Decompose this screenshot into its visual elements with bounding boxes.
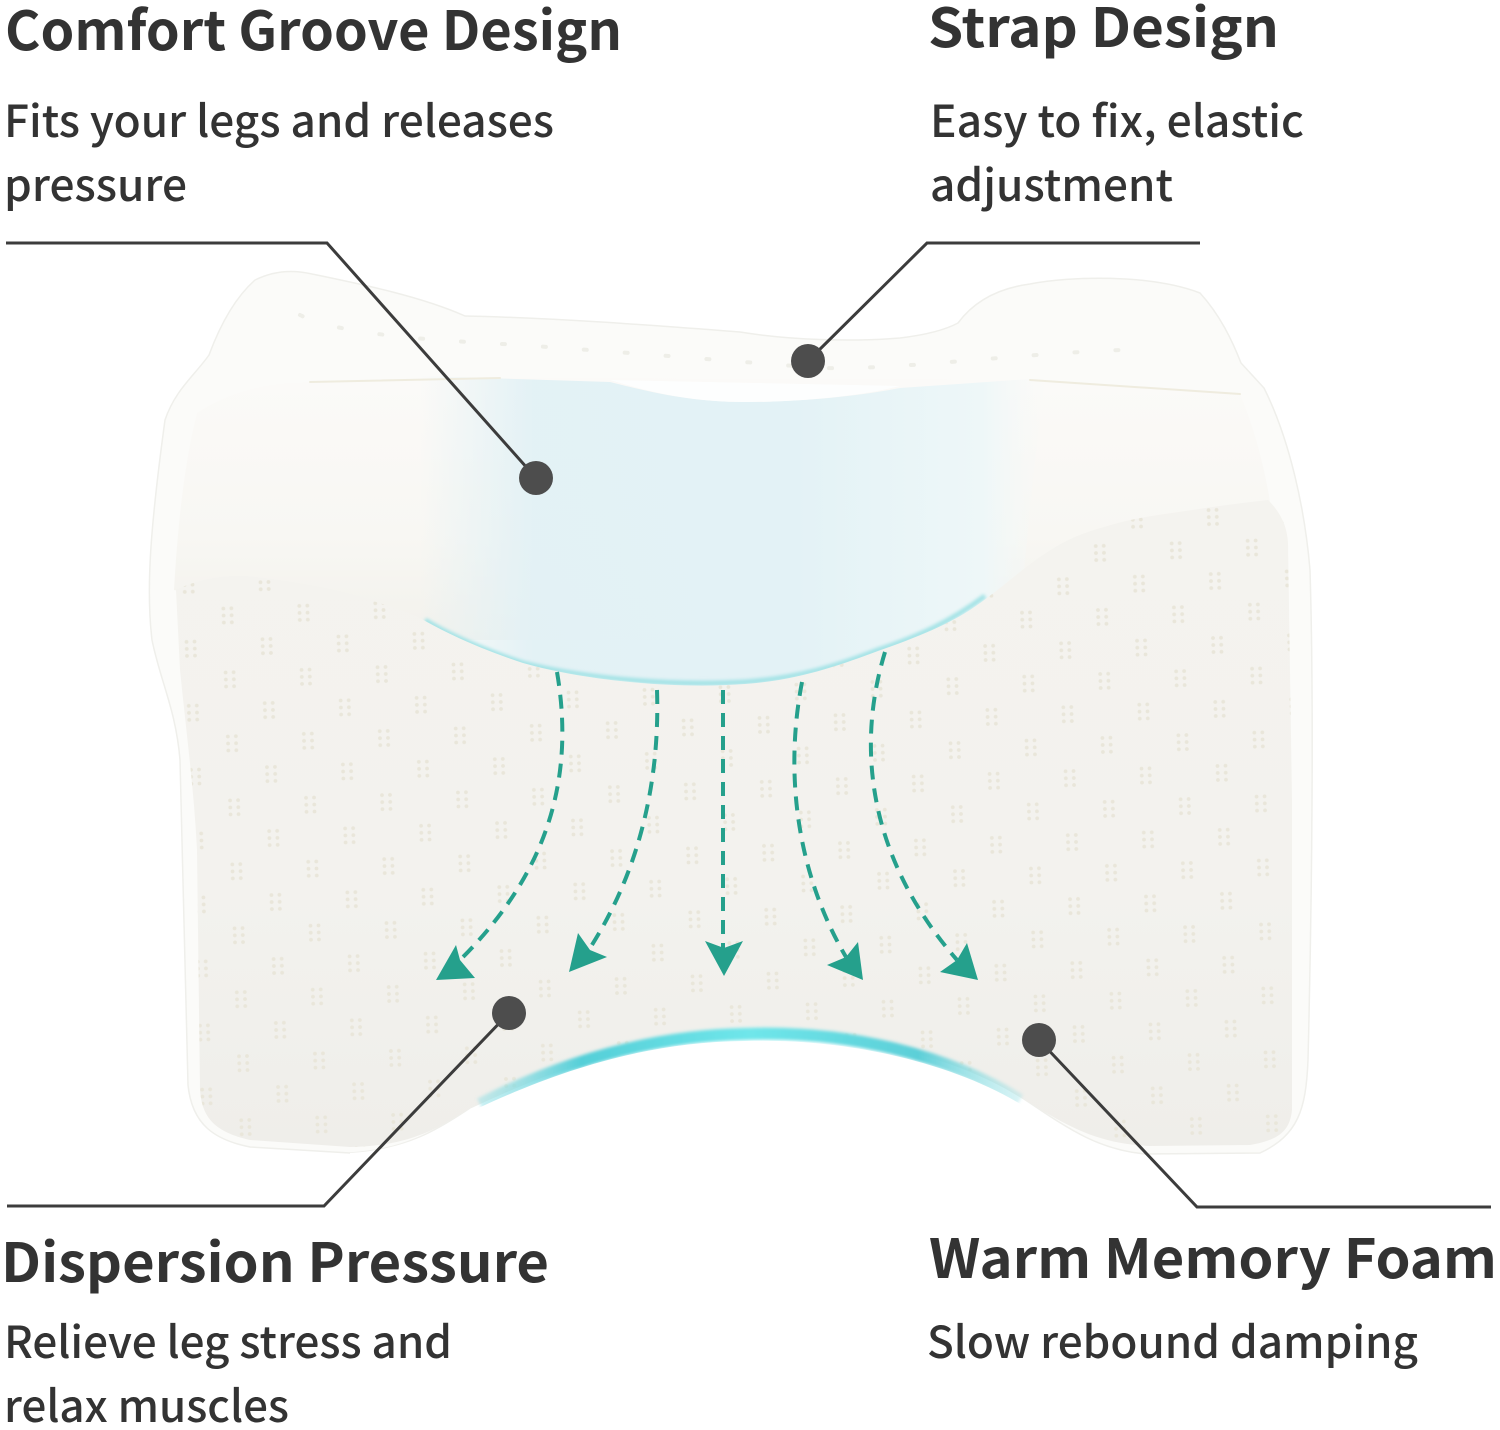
pressure dispersion arrows [436,652,978,980]
text block: strap design: adjustment [930,150,1173,214]
strap texture [300,315,1240,394]
back panel [174,378,1270,640]
strap underside highlight [610,380,900,402]
comfort groove blue area [420,376,1045,700]
arrow 3 [705,690,743,976]
text block: dispersion pressure: Relieve leg stress and [4,1307,452,1371]
callout: strap leader [791,243,1200,378]
text block: warm memory foam [927,1215,1497,1371]
text block: comfort groove: pressure [4,150,187,214]
text block: dispersion pressure: Dispersion Pressure [1,1219,549,1298]
text block: comfort groove [4,0,622,214]
arrow 2 [569,690,657,972]
arrow 1 [436,672,562,980]
text block: dispersion pressure [1,1219,549,1430]
arrow 5 [871,652,978,980]
callout: foam leader [1022,1023,1491,1207]
text block: strap design: Easy to fix, elastic [930,86,1304,150]
lower blue arch [480,1034,1020,1104]
arrow 4 [794,682,863,980]
text block: comfort groove: Fits your legs and releases [4,86,554,150]
groove teal edge [425,596,985,683]
foam front face [176,500,1292,1147]
callout: comfort groove leader [6,243,553,495]
text block: strap design [928,0,1304,214]
callout: dispersion leader [7,996,526,1206]
text block: warm memory foam: Warm Memory Foam [929,1215,1497,1294]
pillow outer cover and strap silhouette [149,272,1312,1154]
pillow illustration [149,272,1312,1170]
text block: warm memory foam: Slow rebound damping [927,1307,1418,1371]
white cutout below arch [350,1041,1145,1170]
